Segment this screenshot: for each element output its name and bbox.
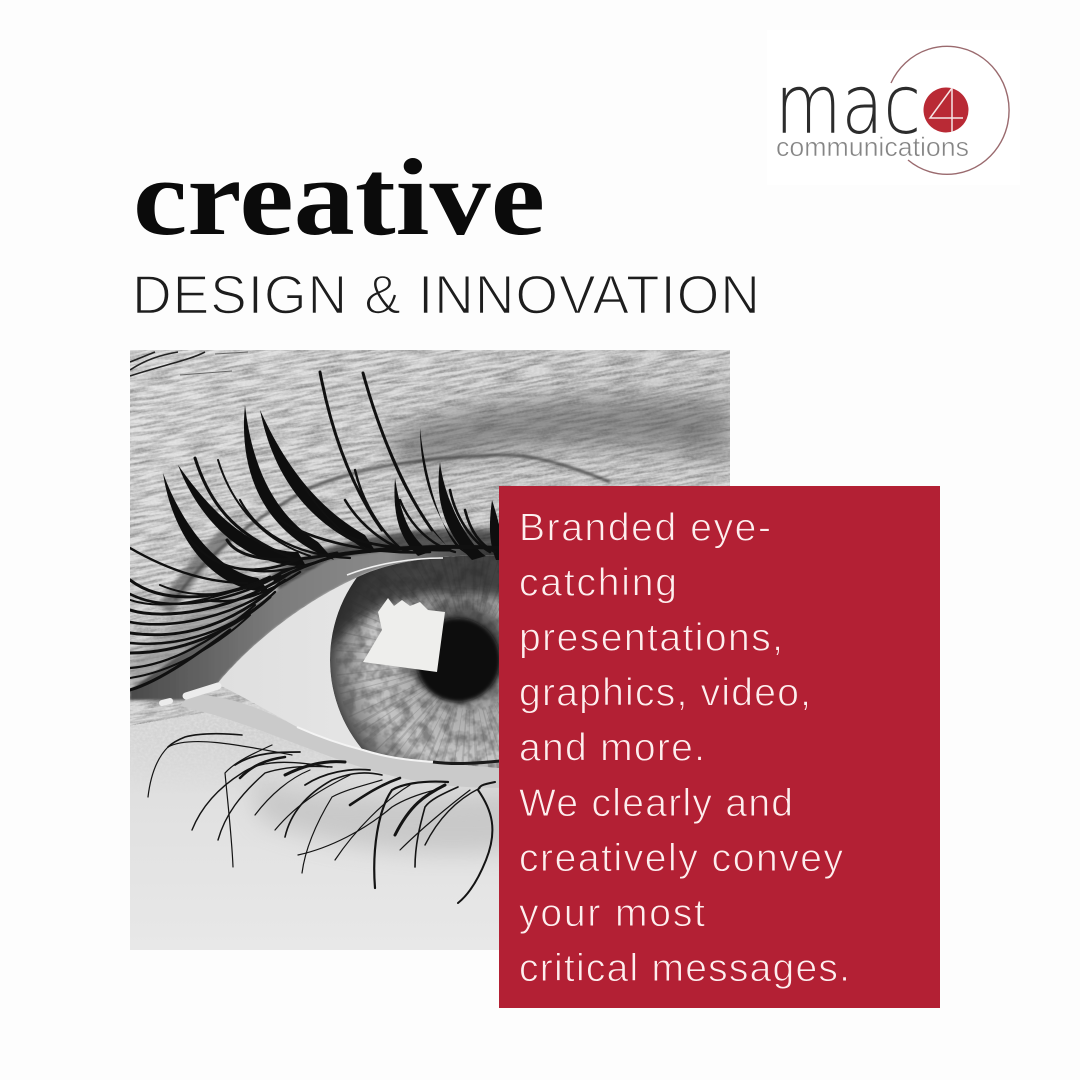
logo wordmark communications: communications: [776, 132, 969, 162]
red text panel: [499, 486, 940, 1008]
panel copy: catching: [519, 562, 677, 604]
panel copy: your most: [519, 892, 705, 935]
title: creative: [133, 137, 545, 258]
panel copy: critical messages.: [519, 947, 850, 990]
lash root shadow: [270, 529, 500, 592]
iris: [330, 555, 499, 768]
upper iris shadow: [330, 555, 499, 650]
panel copy: and more.: [519, 726, 705, 770]
sclera: [218, 555, 494, 748]
lid crease: [175, 455, 610, 600]
pupil halo: [408, 600, 508, 700]
logo ring: [891, 46, 1009, 174]
eye opening: [218, 555, 499, 768]
skin: [130, 350, 730, 784]
top left brow hairs: [130, 352, 205, 376]
panel copy: Branded eye-: [519, 506, 771, 550]
subtitle: DESIGN & INNOVATION: [132, 264, 760, 326]
logo: mac4 communications: [767, 30, 1020, 185]
panel copy: graphics, video,: [519, 672, 811, 714]
logo red dot with 4: [924, 88, 968, 132]
photo: black and white eye close-up: [130, 350, 730, 950]
lower lashes: [148, 734, 495, 903]
panel copy: [519, 506, 850, 990]
upper lashes: [163, 405, 499, 592]
inner corner: [186, 686, 218, 696]
panel copy: We clearly and: [519, 782, 793, 825]
brow shadow: [380, 397, 730, 470]
pupil: [416, 618, 500, 702]
lower lid: [180, 694, 520, 788]
lid band: [130, 547, 520, 700]
lower skin: [130, 766, 499, 950]
logo wordmark mac: mac: [775, 58, 921, 153]
reflection: [363, 598, 445, 672]
panel copy: creatively convey: [519, 837, 844, 880]
lid highlight: [347, 558, 443, 575]
panel copy: presentations,: [519, 616, 783, 660]
lower waterline: [297, 727, 433, 762]
